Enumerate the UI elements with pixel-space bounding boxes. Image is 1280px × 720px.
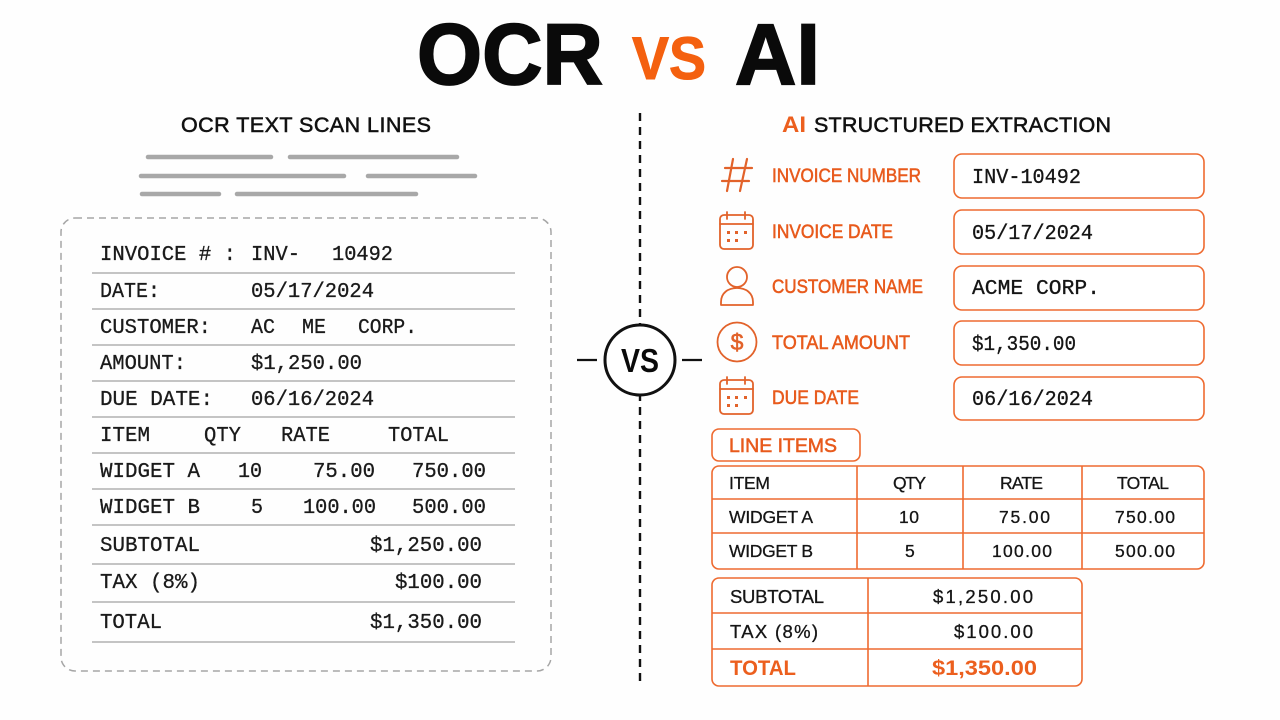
scanned invoice text: $1,350.00 bbox=[370, 611, 482, 635]
scanned invoice text: TOTAL bbox=[100, 611, 162, 635]
totals table: $1,250.00 bbox=[933, 586, 1033, 607]
totals table: SUBTOTAL bbox=[730, 586, 824, 607]
line items table: 75.00 bbox=[999, 507, 1050, 527]
line items table: 5 bbox=[905, 541, 915, 561]
scanned invoice text: 500.00 bbox=[412, 496, 486, 520]
VS badge: VS bbox=[621, 342, 659, 379]
line items table: 750.00 bbox=[1115, 507, 1175, 527]
totals table: $100.00 bbox=[954, 621, 1033, 642]
scanned invoice text: 10 bbox=[238, 460, 262, 484]
scanned invoice text: INVOICE # : bbox=[100, 243, 236, 267]
title: VS bbox=[632, 25, 706, 92]
scanned invoice text: INV- bbox=[251, 243, 300, 267]
scanned invoice text: DATE: bbox=[100, 280, 160, 304]
field: due date bbox=[720, 377, 1204, 420]
field: customer name bbox=[721, 266, 1204, 310]
scanned invoice text: AMOUNT: bbox=[100, 352, 186, 376]
field: due date: DUE DATE bbox=[772, 387, 859, 409]
field: total amount: $1,350.00 bbox=[972, 334, 1076, 357]
line items table: 10 bbox=[899, 507, 919, 527]
center dashed divider bbox=[639, 113, 641, 684]
scanned invoice dashed card bbox=[61, 218, 551, 671]
VS badge bbox=[577, 325, 702, 395]
scanned invoice text: CUSTOMER: bbox=[100, 316, 211, 340]
scanned invoice text: TAX (8%) bbox=[100, 571, 200, 595]
scanned invoice text: 75.00 bbox=[313, 460, 375, 484]
scanned invoice text: 100.00 bbox=[303, 496, 376, 520]
panel: OCR text scan bbox=[61, 113, 551, 671]
line items tag bbox=[712, 429, 860, 461]
line items table: 100.00 bbox=[992, 541, 1052, 561]
totals table bbox=[712, 578, 1082, 686]
icon: hash bbox=[722, 159, 752, 191]
totals table: $1,350.00 bbox=[932, 656, 1037, 680]
scanned invoice row rules bbox=[92, 273, 515, 642]
scanned invoice text: 5 bbox=[251, 496, 263, 520]
line items table bbox=[712, 466, 1204, 569]
icon: dollar coin bbox=[718, 322, 756, 362]
heading: AI structured extraction: STRUCTURED EXTRACTION bbox=[814, 113, 1111, 137]
field: invoice number: INVOICE NUMBER bbox=[772, 165, 921, 187]
field: invoice number: INV-10492 bbox=[972, 167, 1081, 190]
totals table: TOTAL bbox=[730, 656, 796, 680]
field: invoice date bbox=[720, 210, 1204, 254]
scanned invoice text: CORP. bbox=[358, 316, 417, 340]
title bbox=[417, 7, 820, 103]
scanned invoice text: $1,250.00 bbox=[370, 534, 482, 558]
field: invoice date: INVOICE DATE bbox=[772, 221, 893, 243]
scanned invoice text: RATE bbox=[281, 424, 330, 448]
line items table: QTY bbox=[893, 473, 926, 493]
scanned invoice text: AC bbox=[251, 316, 275, 340]
line items table: ITEM bbox=[729, 473, 770, 493]
scanned invoice text: 05/17/2024 bbox=[251, 280, 374, 304]
scanned invoice text bbox=[100, 243, 486, 635]
icon: calendar bbox=[720, 377, 753, 414]
line items table: 500.00 bbox=[1115, 541, 1175, 561]
line items tag: LINE ITEMS bbox=[729, 435, 837, 457]
field: customer name: CUSTOMER NAME bbox=[772, 276, 923, 298]
icon: calendar bbox=[720, 212, 753, 249]
scanned invoice text: 06/16/2024 bbox=[251, 388, 374, 412]
line items table: TOTAL bbox=[1117, 473, 1169, 493]
field: due date: 06/16/2024 bbox=[972, 389, 1093, 412]
scanned invoice text: ME bbox=[302, 316, 326, 340]
scanned invoice text: $100.00 bbox=[395, 571, 482, 595]
title: OCR bbox=[417, 7, 603, 103]
scan lines graphic bbox=[141, 157, 475, 194]
line items table: RATE bbox=[1000, 473, 1043, 493]
line items table: WIDGET B bbox=[729, 541, 813, 561]
scanned invoice text: ITEM bbox=[100, 424, 150, 448]
scanned invoice text: WIDGET A bbox=[100, 460, 200, 484]
field: invoice date: 05/17/2024 bbox=[972, 223, 1093, 246]
heading: OCR text scan lines: OCR TEXT SCAN LINES bbox=[181, 113, 431, 137]
field: total amount bbox=[718, 321, 1204, 365]
scanned invoice text: WIDGET B bbox=[100, 496, 200, 520]
scanned invoice text: 750.00 bbox=[412, 460, 486, 484]
scanned invoice text: $1,250.00 bbox=[251, 352, 362, 376]
line items table: WIDGET A bbox=[729, 507, 813, 527]
icon: person bbox=[721, 267, 753, 305]
scanned invoice text: QTY bbox=[204, 424, 241, 448]
totals table: TAX (8%) bbox=[730, 621, 818, 642]
scanned invoice text: 10492 bbox=[332, 243, 393, 267]
field: invoice number bbox=[722, 154, 1204, 198]
field: total amount: TOTAL AMOUNT bbox=[772, 332, 910, 354]
scanned invoice text: TOTAL bbox=[388, 424, 449, 448]
title: AI bbox=[735, 7, 820, 103]
icon: dollar coin: $ bbox=[731, 329, 744, 355]
scanned invoice text: DUE DATE: bbox=[100, 388, 213, 412]
field: customer name: ACME CORP. bbox=[972, 278, 1100, 301]
scanned invoice text: SUBTOTAL bbox=[100, 534, 200, 558]
panel: AI structured extraction bbox=[712, 112, 1204, 686]
heading: AI structured extraction: AI bbox=[782, 112, 806, 137]
